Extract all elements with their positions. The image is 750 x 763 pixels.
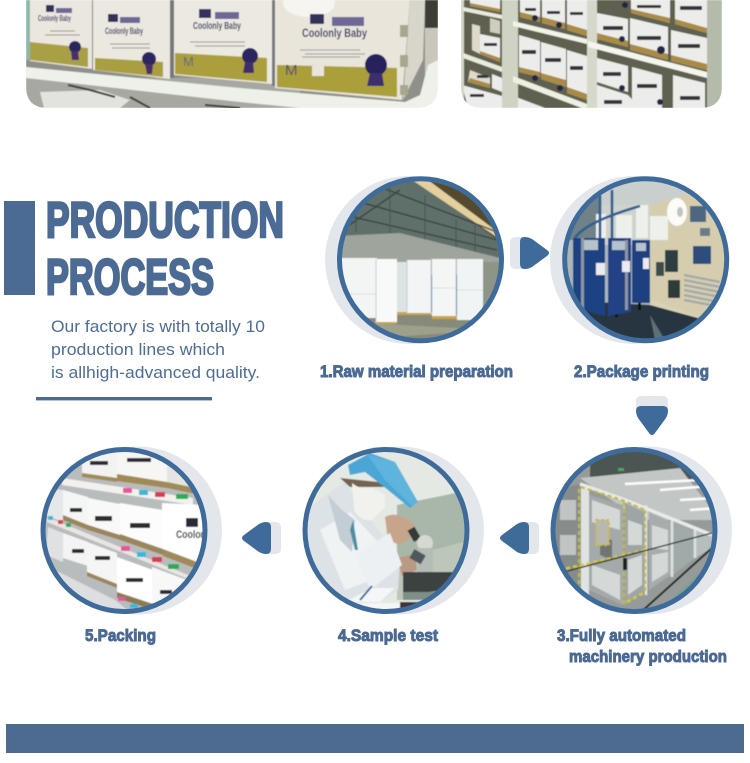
step 3 label: [557, 626, 727, 666]
arrow: step 2 to 3: [636, 396, 668, 435]
underline rule: [36, 397, 212, 400]
step 5: packing photo: Coolon: [176, 529, 206, 541]
intro paragraph: [51, 317, 265, 382]
step 1: raw material preparation photo: [325, 175, 505, 345]
arrow: step 4 to 5: [242, 522, 281, 554]
heading line 2: PROCESS: [46, 249, 214, 305]
heading line 1: PRODUCTION: [46, 192, 284, 248]
step 3 label: 3.Fully automated: [557, 626, 686, 645]
photo: diaper boxes on store shelf: [26, 0, 438, 108]
step 2 label: 2.Package printing: [574, 362, 709, 381]
photo: diaper boxes on store shelf: M: [285, 62, 298, 79]
photo: diaper boxes on store shelf: Coolonly Baby: [105, 26, 143, 36]
heading: production process: [4, 192, 284, 305]
photo: diaper boxes on store shelf: M: [183, 54, 194, 69]
step 5: packing photo: [40, 445, 222, 615]
arrow: step 1 to 2: [510, 237, 549, 269]
photo: diaper boxes on store shelf: Coolonly Baby: [302, 26, 367, 40]
bottom band: [6, 724, 744, 753]
intro paragraph: is allhigh-advanced quality.: [51, 363, 260, 382]
intro paragraph: Our factory is with totally 10: [51, 317, 265, 336]
photo: warehouse shelves of diapers: [461, 0, 722, 110]
step 3: fully automated machinery photo: [550, 445, 732, 625]
step 4 label: 4.Sample test: [338, 626, 438, 645]
step 1 label: 1.Raw material preparation: [320, 362, 513, 381]
arrow: step 3 to 4: [500, 522, 539, 554]
step 2: package printing photo: [550, 175, 735, 345]
step 4: sample test photo: [300, 445, 484, 620]
intro paragraph: production lines which: [51, 340, 225, 359]
photo: diaper boxes on store shelf: Coolonly Baby: [193, 21, 241, 32]
photo: diaper boxes on store shelf: Coolonly Baby: [38, 14, 71, 23]
step 3 label: machinery production: [569, 647, 727, 666]
heading accent bar: [4, 201, 35, 295]
step 5 label: 5.Packing: [85, 626, 156, 645]
